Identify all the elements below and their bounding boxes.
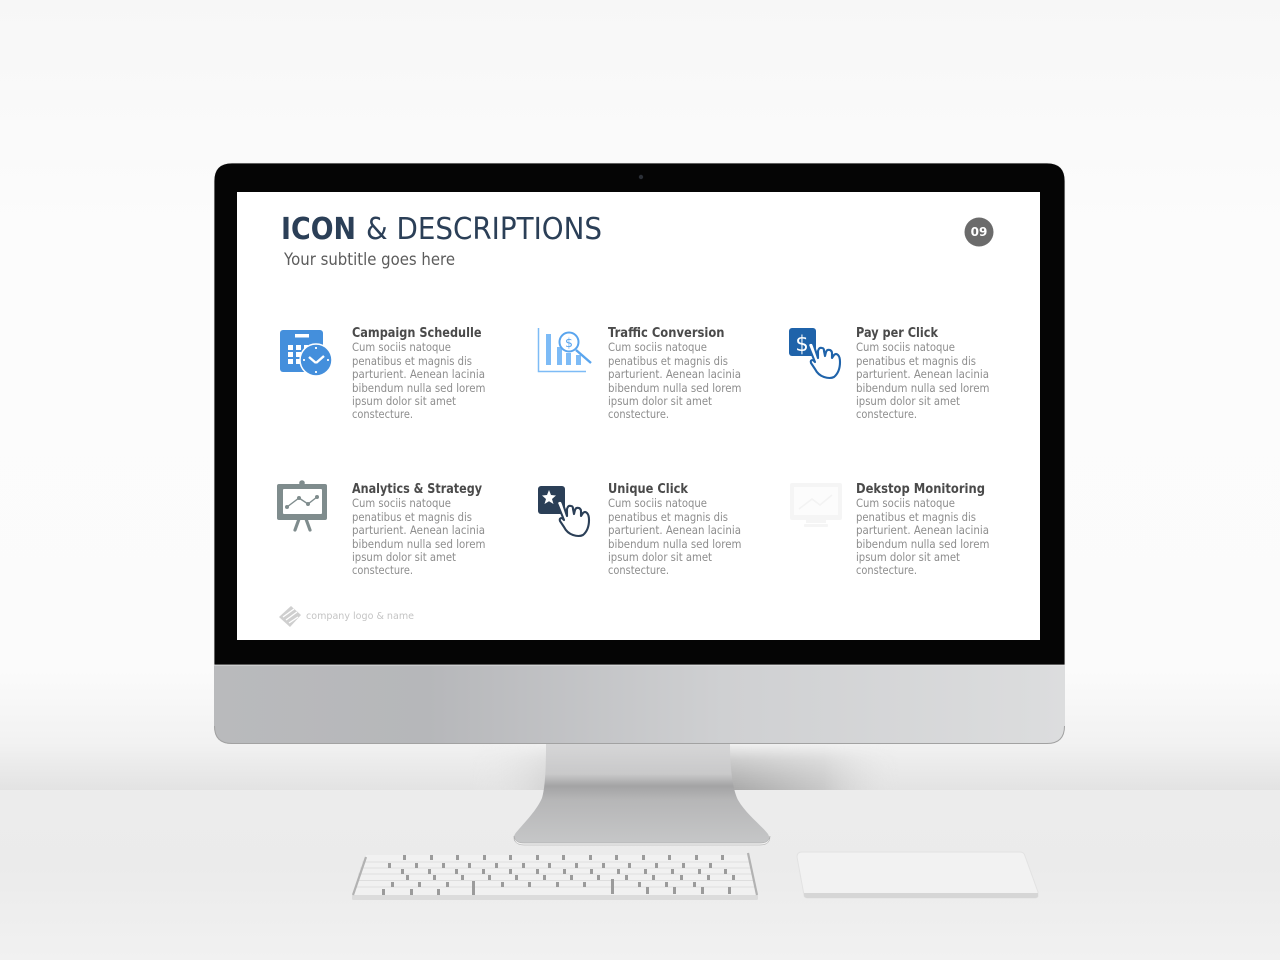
description: ipsum dolor sit amet (608, 394, 712, 408)
description: constecture. (856, 407, 917, 421)
icon: star button with hand (538, 486, 589, 536)
monitor bezel (214, 163, 1065, 665)
description (856, 340, 990, 421)
monitor chin (214, 665, 1065, 744)
description (608, 340, 742, 421)
description: ipsum dolor sit amet (608, 550, 712, 564)
description: Cum sociis natoque (352, 340, 451, 354)
panel: analytics and strategy (277, 480, 486, 577)
description: bibendum nulla sed lorem (352, 381, 486, 395)
panel: campaign schedule (280, 325, 486, 421)
keyboard (352, 853, 758, 900)
description (856, 496, 990, 577)
description (352, 496, 486, 577)
monitor chin bottom edge (214, 726, 1064, 744)
icon: bar chart with magnifier (538, 328, 591, 372)
description: penatibus et magnis dis (608, 510, 728, 524)
title (281, 212, 602, 247)
heading: Pay per Click (856, 325, 939, 341)
description: ipsum dolor sit amet (856, 550, 960, 564)
description: bibendum nulla sed lorem (608, 537, 742, 551)
monitor stand (514, 744, 770, 845)
page number badge: 09 (971, 225, 987, 239)
trackpad (797, 852, 1038, 898)
heading: Unique Click (608, 481, 689, 497)
panel: unique click (538, 481, 742, 577)
subtitle: Your subtitle goes here (283, 250, 455, 269)
icon: presentation board (277, 480, 327, 530)
description: bibendum nulla sed lorem (608, 381, 742, 395)
keys (382, 855, 735, 895)
description (352, 340, 486, 421)
icon: dollar button with hand: $ (795, 332, 809, 356)
description: Cum sociis natoque (352, 496, 451, 510)
description: bibendum nulla sed lorem (856, 537, 990, 551)
panel: traffic conversion (538, 325, 742, 421)
company logo and name: company logo & name (306, 611, 414, 622)
description: constecture. (608, 563, 669, 577)
description: penatibus et magnis dis (856, 354, 976, 368)
description: ipsum dolor sit amet (352, 394, 456, 408)
description: penatibus et magnis dis (352, 354, 472, 368)
heading: Campaign Schedulle (352, 325, 482, 341)
webcam (639, 175, 643, 179)
description: constecture. (352, 407, 413, 421)
description: Cum sociis natoque (608, 496, 707, 510)
description: parturient. Aenean lacinia (608, 367, 741, 381)
title: ICON (281, 212, 356, 247)
description: parturient. Aenean lacinia (352, 523, 485, 537)
description: constecture. (608, 407, 669, 421)
screen (237, 192, 1040, 640)
panel: desktop monitoring (790, 481, 990, 577)
monitor stand shadow on wall (528, 748, 859, 790)
icon: calendar and clock (280, 330, 332, 376)
description: ipsum dolor sit amet (856, 394, 960, 408)
description (608, 496, 742, 577)
description: Cum sociis natoque (856, 340, 955, 354)
description: parturient. Aenean lacinia (352, 367, 485, 381)
description: constecture. (856, 563, 917, 577)
description: ipsum dolor sit amet (352, 550, 456, 564)
title: & DESCRIPTIONS (366, 212, 602, 247)
description: parturient. Aenean lacinia (856, 367, 989, 381)
monitor (214, 163, 1065, 744)
icon: pale desktop monitor (790, 483, 842, 527)
company logo and name (279, 606, 414, 627)
icon: dollar button with hand (789, 328, 840, 378)
description: parturient. Aenean lacinia (856, 523, 989, 537)
description: bibendum nulla sed lorem (352, 537, 486, 551)
heading: Traffic Conversion (608, 325, 724, 341)
heading: Analytics & Strategy (352, 481, 482, 497)
description: penatibus et magnis dis (856, 510, 976, 524)
description: penatibus et magnis dis (352, 510, 472, 524)
panel: pay per click (789, 325, 990, 421)
description: Cum sociis natoque (856, 496, 955, 510)
page number badge (964, 218, 994, 246)
description: bibendum nulla sed lorem (856, 381, 990, 395)
description: parturient. Aenean lacinia (608, 523, 741, 537)
icon: bar chart with magnifier: $ (565, 335, 573, 350)
heading: Dekstop Monitoring (856, 481, 985, 497)
description: penatibus et magnis dis (608, 354, 728, 368)
description: constecture. (352, 563, 413, 577)
description: Cum sociis natoque (608, 340, 707, 354)
